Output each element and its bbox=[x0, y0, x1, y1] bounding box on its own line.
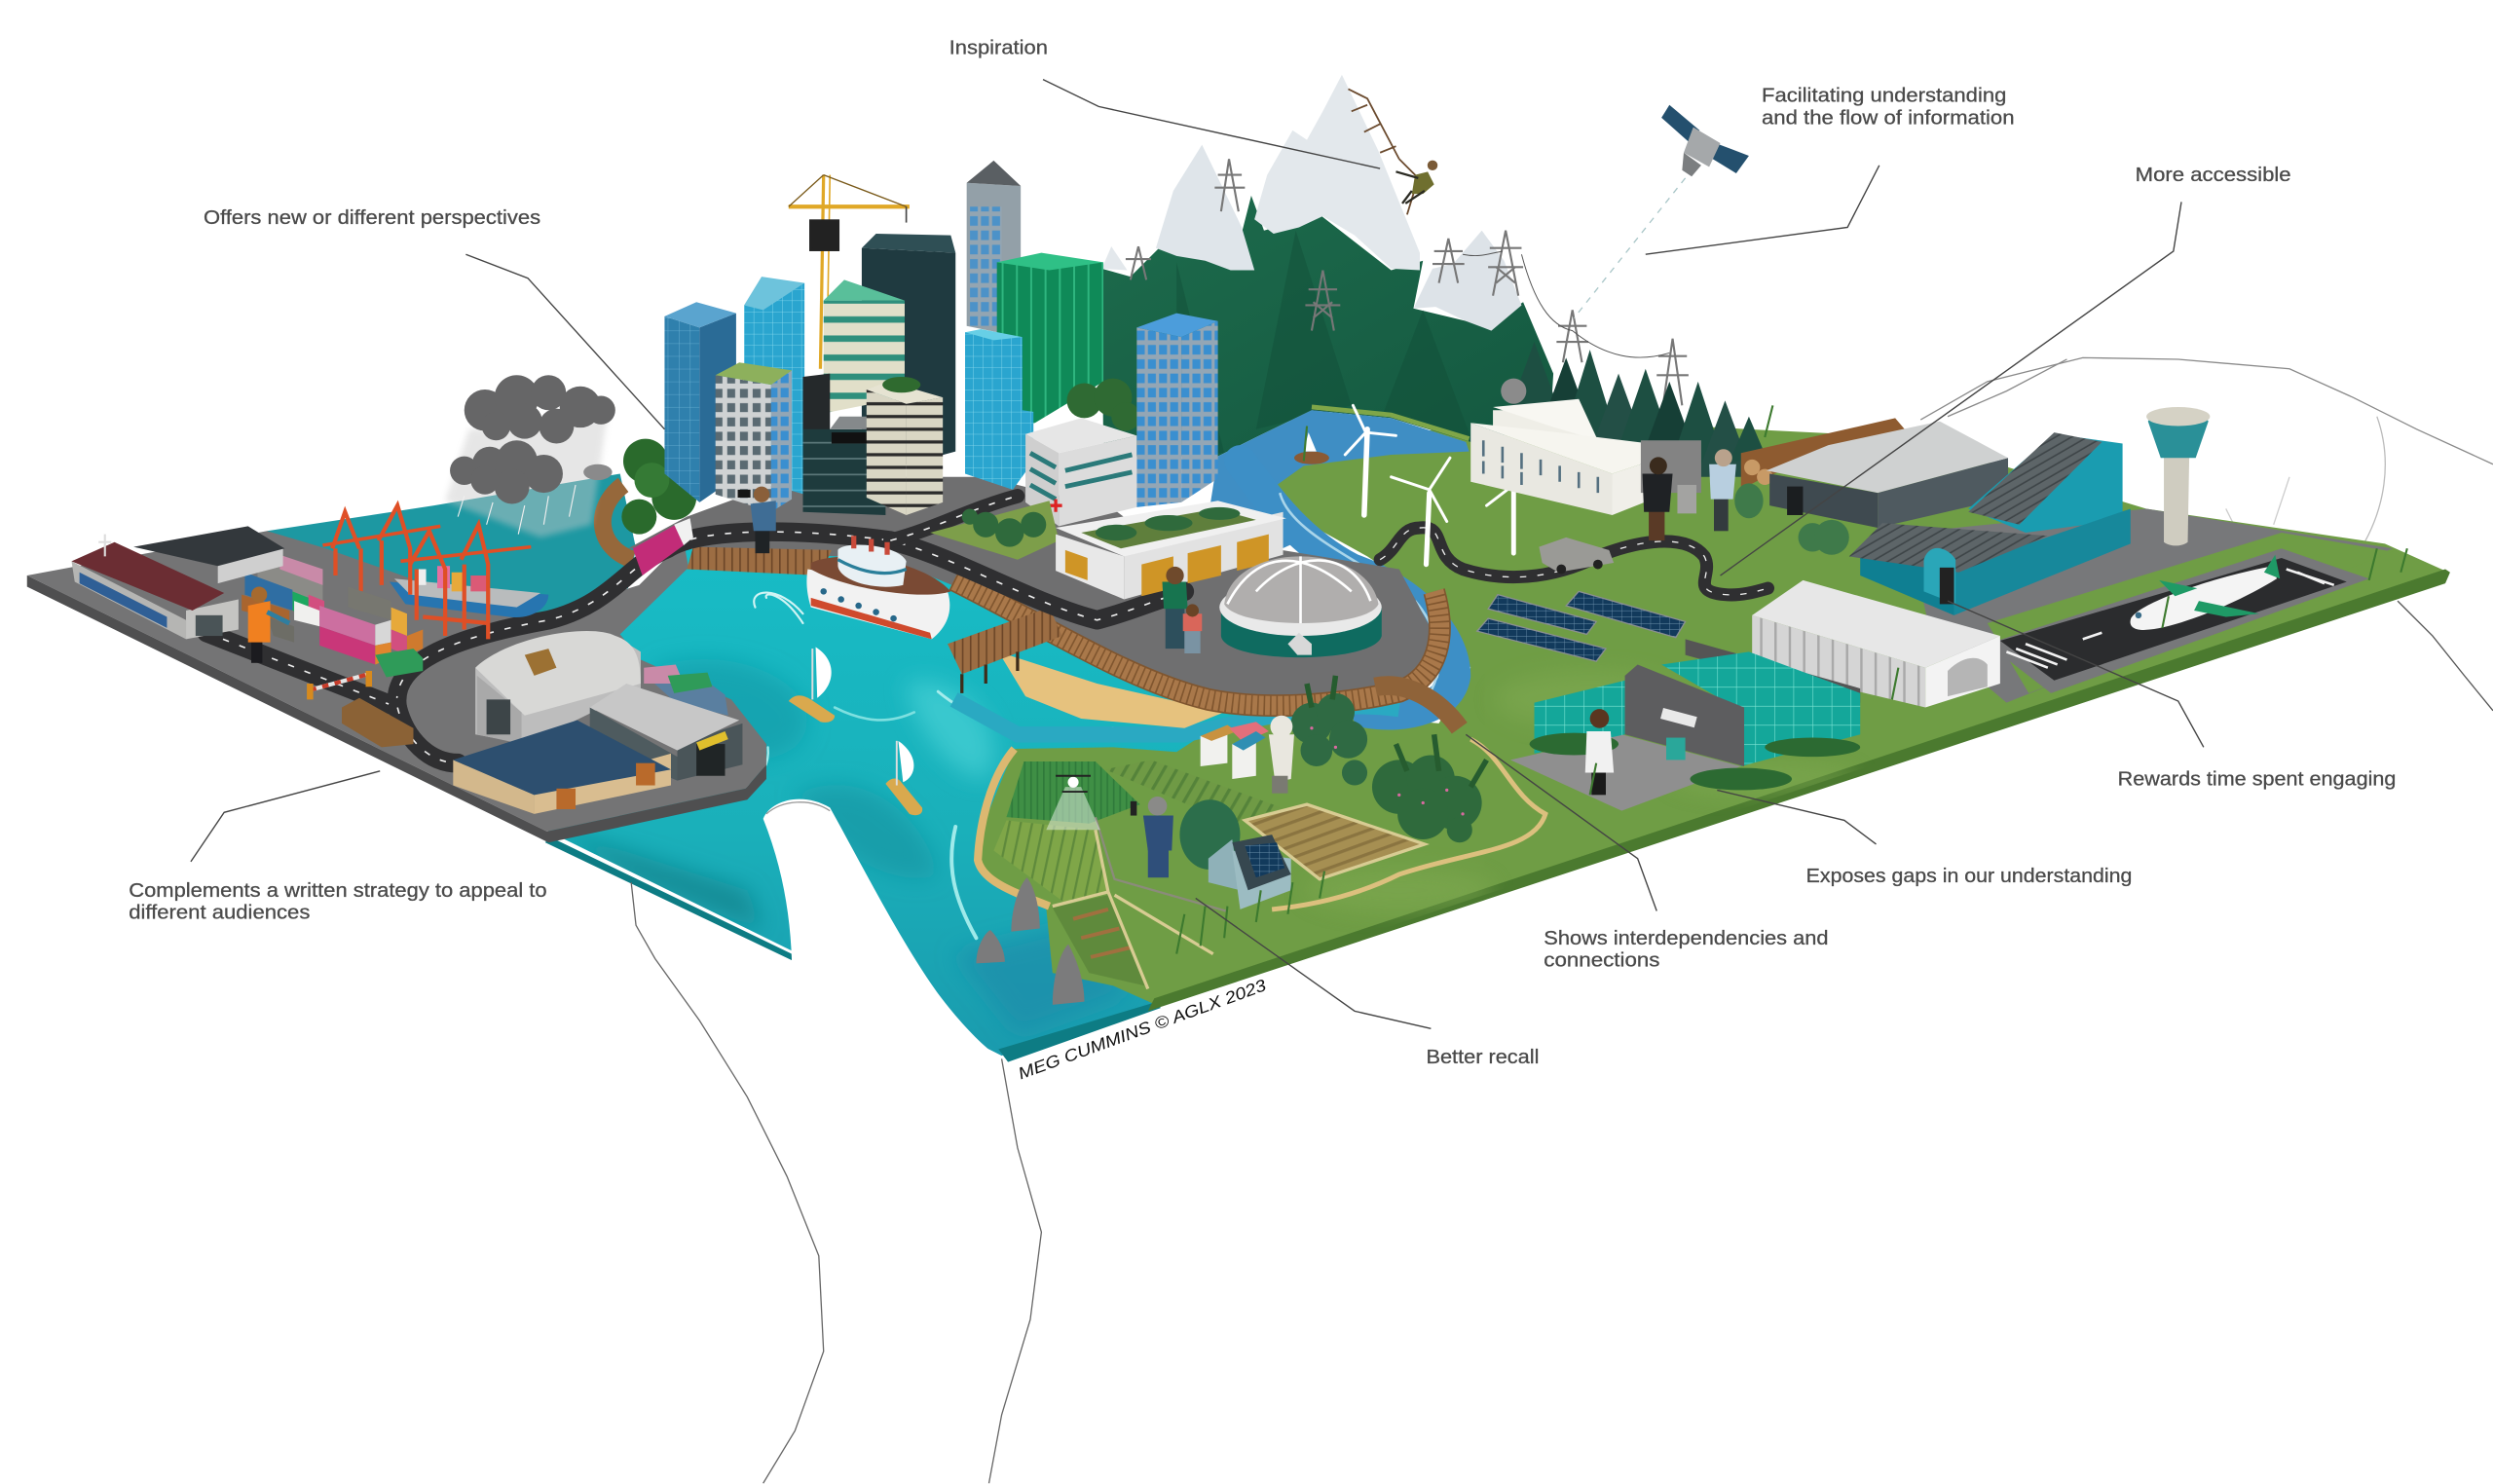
log pile bbox=[1741, 418, 1905, 490]
airport ground bbox=[1908, 508, 2393, 703]
small park bbox=[930, 501, 1059, 560]
building: cyan tower bbox=[744, 277, 804, 495]
label: Offers new or different perspectives: Offers new or different perspectives bbox=[204, 206, 540, 229]
road: winding countryside bbox=[1380, 528, 1768, 595]
sand path bbox=[1272, 739, 1545, 909]
flowering bushes bbox=[1291, 676, 1487, 842]
label: Complements a written strategy: Complements a written strategy to appeal to bbox=[129, 879, 547, 902]
label: Facilitating understanding: Facilitating understanding bbox=[1762, 84, 2006, 106]
building: cream striped bbox=[867, 377, 943, 515]
hand sketch: right side bbox=[1920, 357, 2493, 711]
shed with snowy roof bbox=[1767, 422, 2008, 528]
base: main water bbox=[545, 548, 1256, 1056]
city and plaza ground bbox=[628, 477, 1439, 709]
tree by cottage bbox=[1179, 799, 1240, 870]
green strip bbox=[1988, 533, 2393, 693]
people: two colleagues bbox=[1643, 449, 1736, 540]
beehives bbox=[1201, 722, 1269, 779]
warehouse: dark grey bbox=[590, 684, 742, 781]
storm clouds and rain bbox=[445, 375, 615, 538]
dome arena bbox=[1219, 556, 1382, 657]
label: Shows interdependencies and connections: connections bbox=[1544, 949, 1659, 972]
label: Inspiration: Inspiration bbox=[949, 37, 1048, 59]
label: Complements a written strategy: different audiences bbox=[129, 902, 310, 924]
mountains bbox=[1101, 75, 1553, 457]
pond boat bbox=[1294, 432, 1329, 464]
snow peak left bbox=[1156, 145, 1254, 271]
base: concrete edge bbox=[27, 575, 766, 842]
hangar: grey arched bbox=[475, 631, 641, 744]
water tone blobs bbox=[548, 659, 1129, 1033]
car bbox=[1539, 538, 1614, 574]
trees by the wharf bbox=[621, 439, 696, 535]
farm fields bbox=[993, 760, 1425, 989]
building: dark teal tower bbox=[862, 234, 955, 477]
people: adult and child bbox=[1162, 567, 1202, 653]
warehouse: red roof bbox=[71, 535, 239, 639]
electricity pylons bbox=[1126, 159, 1689, 405]
water highlights bbox=[747, 593, 1113, 938]
bushes near shed bbox=[1734, 483, 1849, 555]
beekeeper bbox=[1269, 716, 1294, 794]
label: Facilitating understanding bbox=[1762, 84, 2015, 129]
base: back harbour water bbox=[267, 474, 636, 623]
boardwalks bbox=[603, 485, 1460, 728]
road: harbour main bbox=[206, 496, 1184, 763]
shop with rooftop garden bbox=[1056, 501, 1286, 600]
finger of the hand bbox=[763, 799, 1002, 1058]
label: Rewards time spent engaging: Rewards time spent engaging bbox=[2118, 768, 2396, 791]
base: green land bbox=[978, 417, 2448, 1005]
building: white grid bbox=[716, 362, 792, 512]
barrier and cargo crates bbox=[307, 671, 413, 747]
white hangar by runway bbox=[1752, 580, 2000, 708]
sailboats bbox=[789, 647, 922, 815]
small containers behind warehouse bbox=[644, 664, 728, 716]
runway bbox=[2000, 558, 2347, 681]
building: cyan stepped bbox=[965, 329, 1033, 490]
water edge bbox=[545, 836, 1161, 1062]
paved court bbox=[1510, 734, 1741, 811]
runway border bbox=[1988, 548, 2369, 693]
satellite signal bbox=[1574, 178, 1686, 318]
runway markings bbox=[2006, 569, 2334, 668]
airplane bbox=[2131, 555, 2280, 630]
label: Complements a written strategy bbox=[129, 879, 547, 924]
building: grey tower bbox=[967, 161, 1021, 337]
label: More accessible: More accessible bbox=[2136, 164, 2291, 186]
rocks in the sea bbox=[976, 877, 1084, 1005]
forest bbox=[1503, 342, 1768, 477]
artist signature: MEG CUMMINS © AGLX 2023 bbox=[1016, 975, 1269, 1083]
climber and rope ladder bbox=[1348, 89, 1437, 214]
orange gantry cranes bbox=[322, 505, 531, 639]
farmer with phone bbox=[1131, 797, 1173, 877]
building: dark low-rise bbox=[802, 374, 885, 515]
worker in hi-vis vest bbox=[248, 586, 289, 663]
cottage bbox=[1209, 835, 1291, 909]
terminal: front wing bbox=[1849, 508, 2131, 615]
building: hospital bbox=[1025, 418, 1136, 526]
beach sand bbox=[998, 651, 1224, 728]
trees behind hospital bbox=[1067, 379, 1140, 430]
snow peak centre bbox=[1254, 75, 1420, 271]
base: concrete quay left bbox=[27, 531, 766, 832]
wind turbines bbox=[1345, 405, 1543, 565]
white research building bbox=[1470, 379, 1701, 515]
container ship bbox=[390, 566, 548, 617]
mountain shading bbox=[1176, 231, 1470, 453]
river bbox=[954, 407, 1470, 734]
truck bbox=[633, 518, 693, 575]
solar panels bbox=[1477, 591, 1686, 661]
light patches on land bbox=[1338, 686, 1850, 917]
construction crane bbox=[789, 175, 910, 369]
hand sketch: lower left bbox=[631, 882, 1041, 1483]
photographer bbox=[738, 487, 776, 553]
reeds along edge bbox=[1176, 405, 2407, 954]
cruise ship bbox=[806, 536, 950, 639]
terminal: teal back wing bbox=[1968, 432, 2123, 533]
scientist bbox=[1585, 709, 1614, 795]
hedges bbox=[1530, 733, 1860, 790]
base: green land edge bbox=[1148, 569, 2450, 1011]
snow peak right bbox=[1413, 231, 1521, 331]
label: Better recall: Better recall bbox=[1426, 1046, 1539, 1068]
drone spraying bbox=[1046, 776, 1100, 830]
building: striped green tower bbox=[824, 279, 905, 413]
shipping containers bbox=[242, 555, 423, 678]
label: Shows interdependencies and connections: Shows interdependencies and bbox=[1544, 927, 1829, 949]
label: Shows interdependencies and connections bbox=[1544, 927, 1829, 972]
control tower bbox=[2146, 407, 2210, 545]
satellite bbox=[1661, 105, 1749, 176]
building: emerald tower bbox=[997, 253, 1103, 429]
leader lines bbox=[191, 80, 2204, 1028]
label: Facilitating understanding: and the flow of information bbox=[1762, 106, 2015, 129]
warehouse: blue roof bbox=[453, 721, 671, 814]
label: Exposes gaps in our understanding: Exposes gaps in our understanding bbox=[1806, 865, 2132, 887]
green mountain mass bbox=[1101, 196, 1553, 457]
snow peak small bbox=[1101, 246, 1128, 271]
sand coast bbox=[978, 749, 1050, 907]
building: blue glass tower bbox=[664, 302, 736, 502]
building: blue tower bbox=[1136, 314, 1218, 507]
warehouse: black roof bbox=[133, 526, 284, 583]
greenhouse complex bbox=[1535, 639, 1860, 766]
